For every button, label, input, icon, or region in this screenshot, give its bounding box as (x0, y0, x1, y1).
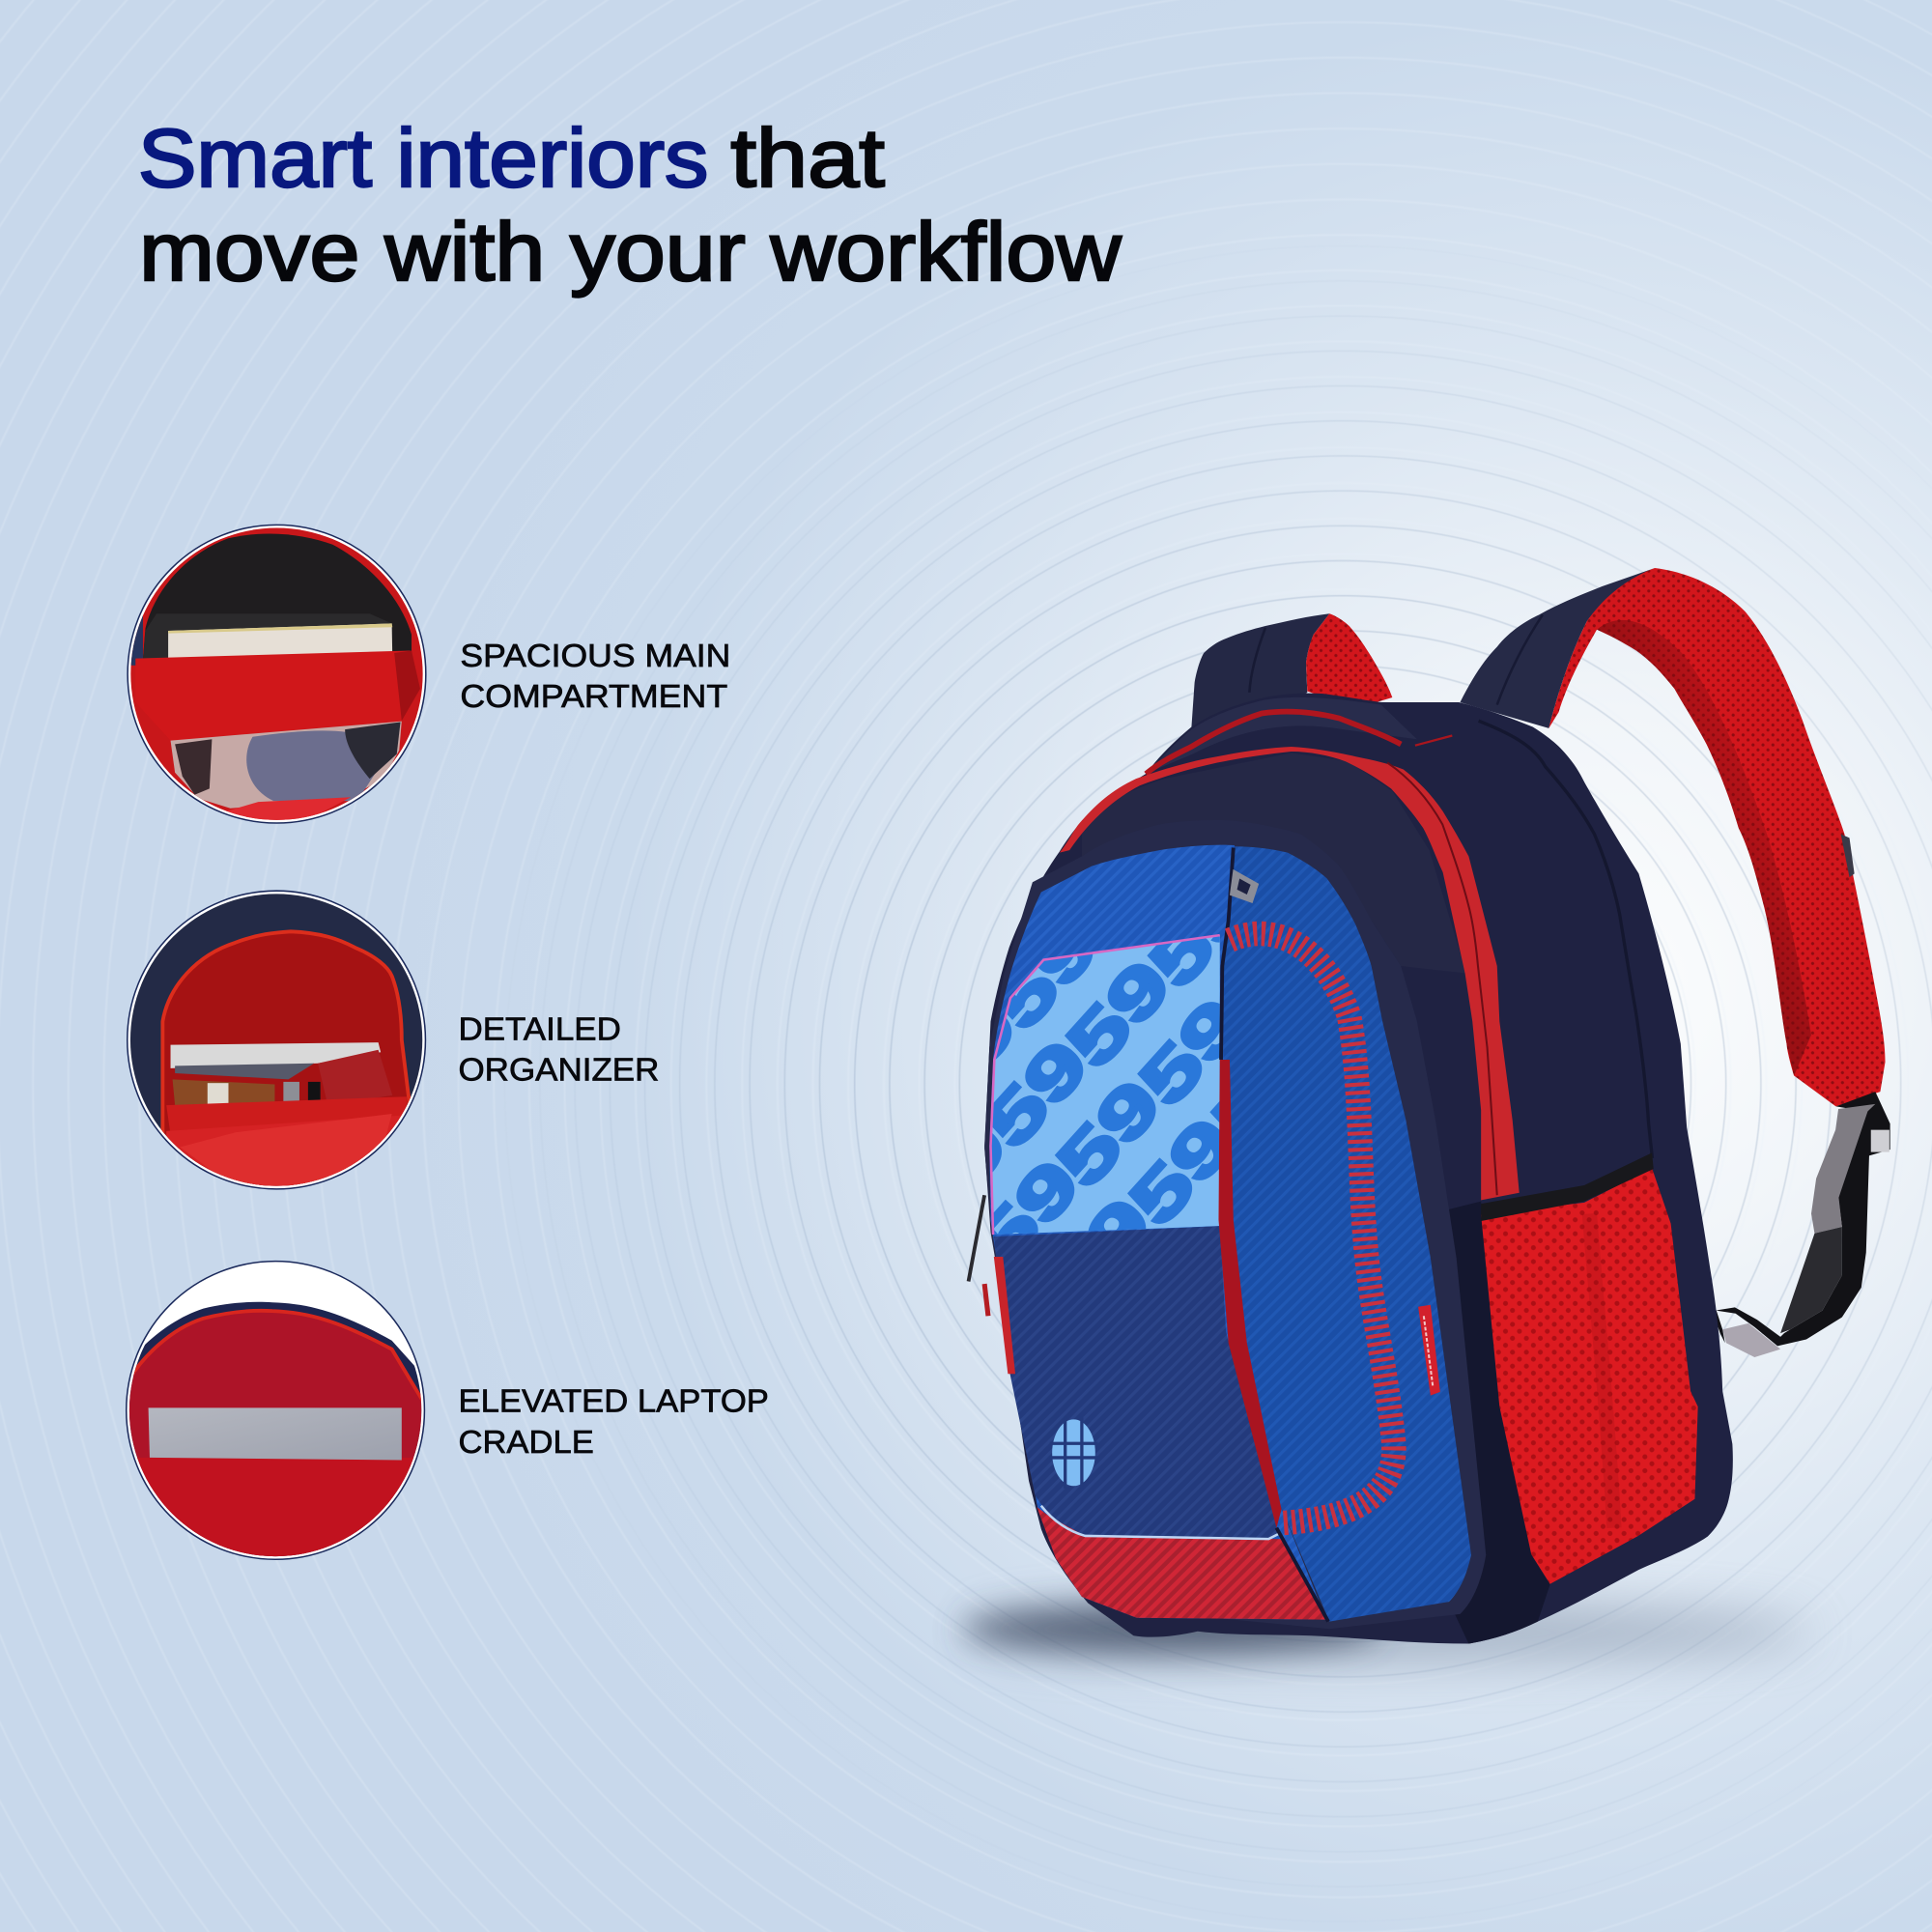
pattern panel with 59 graphic: 59 (888, 1107, 1022, 1244)
side mesh pocket (1481, 1152, 1698, 1584)
backpack main body (984, 694, 1733, 1644)
icon: laptop cradle photo circle (124, 1262, 431, 1577)
lower strap webbing and buckle (1713, 1092, 1890, 1357)
strap red mesh (1548, 568, 1886, 1106)
black pocket band (1481, 1152, 1654, 1221)
title: Smart interiors (138, 113, 708, 205)
strap side buckle (1841, 835, 1855, 877)
icon: organizer photo circle (124, 887, 431, 1195)
top fold highlight (1082, 753, 1466, 974)
front pocket navy rim (984, 820, 1486, 1629)
pattern panel with 59 graphic: 59 (898, 988, 1032, 1124)
pattern panel with 59 graphic: 59 (1135, 866, 1268, 1003)
pattern panel with 59 graphic: 59 (1052, 946, 1186, 1083)
far shoulder strap (1191, 613, 1392, 739)
title: that (730, 113, 885, 205)
pattern panel with 59 graphic: 59 (1198, 1022, 1331, 1159)
pattern panel with 59 graphic: 59 (1042, 1065, 1177, 1202)
label: spacious main compartment: SPACIOUS MAIN (460, 639, 730, 674)
dark strip beside front pocket (1417, 1202, 1550, 1644)
pattern panel with 59 graphic: 59 (1124, 984, 1259, 1121)
label: spacious main compartment (460, 639, 730, 715)
pattern panel with 59 graphic (888, 866, 1331, 1360)
icon: round logo (1050, 1417, 1097, 1489)
front right panel (1218, 846, 1471, 1622)
title (138, 113, 1122, 298)
near shoulder strap (1460, 568, 1886, 1106)
front left panel (888, 845, 1331, 1620)
icon: main compartment photo circle (124, 518, 431, 826)
feature: elevated laptop cradle (124, 1262, 769, 1577)
pattern panel with 59 graphic: 59 (1105, 1223, 1239, 1360)
pattern panel with 59 graphic: 59 (1033, 1183, 1166, 1321)
label: elevated laptop cradle: ELEVATED LAPTOP (458, 1384, 769, 1420)
lower navy panel (994, 1226, 1278, 1539)
zip pull (969, 1195, 988, 1316)
pattern panel with 59 graphic: 59 (961, 1146, 1094, 1282)
pattern panel with 59 graphic: 59 (970, 1026, 1103, 1163)
pattern panel with 59 graphic: 59 (1115, 1103, 1249, 1240)
feature: spacious main compartment (124, 518, 730, 826)
red tick arc (1230, 933, 1394, 1523)
red side sliver (994, 1257, 1015, 1374)
label: detailed organizer (458, 1012, 659, 1089)
zipper buckle tag (1230, 869, 1259, 903)
darker concentric rings (610, 351, 1932, 1817)
panel edge line (1041, 1506, 1278, 1539)
red zip piping (1060, 747, 1520, 1200)
label: elevated laptop cradle (458, 1384, 769, 1461)
label: elevated laptop cradle: CRADLE (458, 1425, 594, 1461)
label: detailed organizer: DETAILED (458, 1012, 621, 1048)
label: spacious main compartment: COMPARTMENT (460, 679, 727, 715)
red seam flap (1218, 1060, 1282, 1528)
label: detailed organizer: ORGANIZER (458, 1053, 659, 1089)
title: move with your workflow (139, 207, 1122, 298)
red brand tag (1418, 1305, 1440, 1396)
red bottom band (1037, 1507, 1326, 1620)
backpack (888, 568, 1890, 1660)
outer side seam band (1479, 721, 1652, 1158)
pattern panel with 59 graphic: 59 (980, 908, 1113, 1044)
top handle (1146, 697, 1452, 774)
ground shadow (961, 1605, 1811, 1660)
feature: detailed organizer (124, 887, 659, 1195)
